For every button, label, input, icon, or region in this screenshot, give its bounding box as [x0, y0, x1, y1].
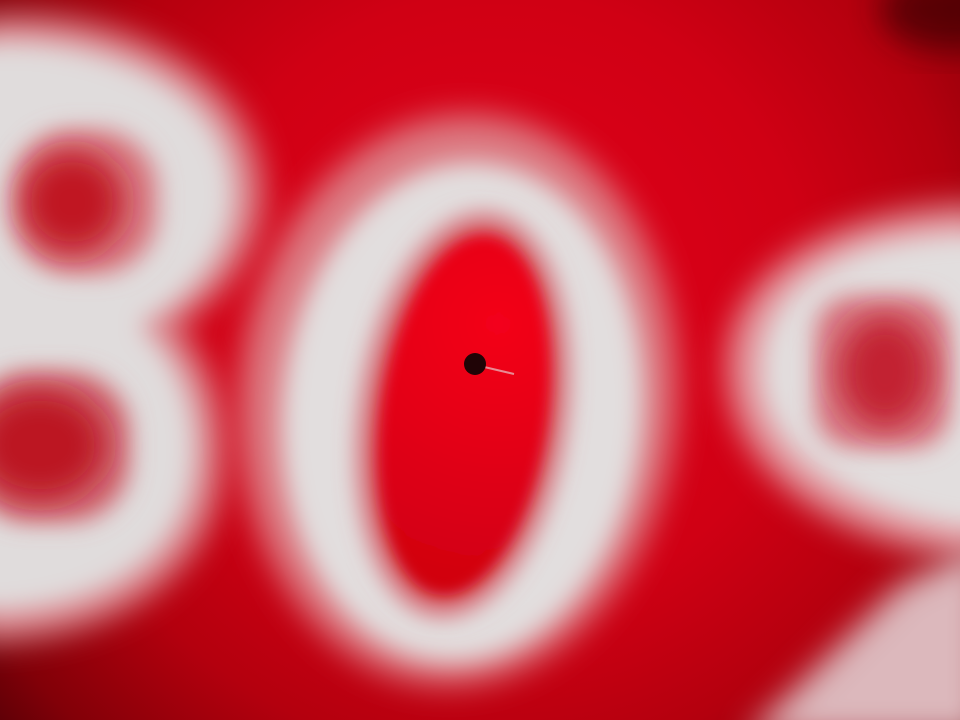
numeral 3 upper counter [14, 130, 158, 274]
numeral: partial 9 ring [728, 205, 960, 560]
numeral: 3 [0, 16, 262, 640]
numeral 0 counter [355, 223, 573, 607]
numeral 9 counter [815, 296, 950, 448]
numeral: lower-right blurred shape [745, 545, 960, 720]
vignette corner [880, 0, 960, 50]
numeral: 0 [216, 97, 700, 703]
numeral 3 lower counter [0, 372, 130, 522]
centre dot and needle [464, 353, 514, 375]
